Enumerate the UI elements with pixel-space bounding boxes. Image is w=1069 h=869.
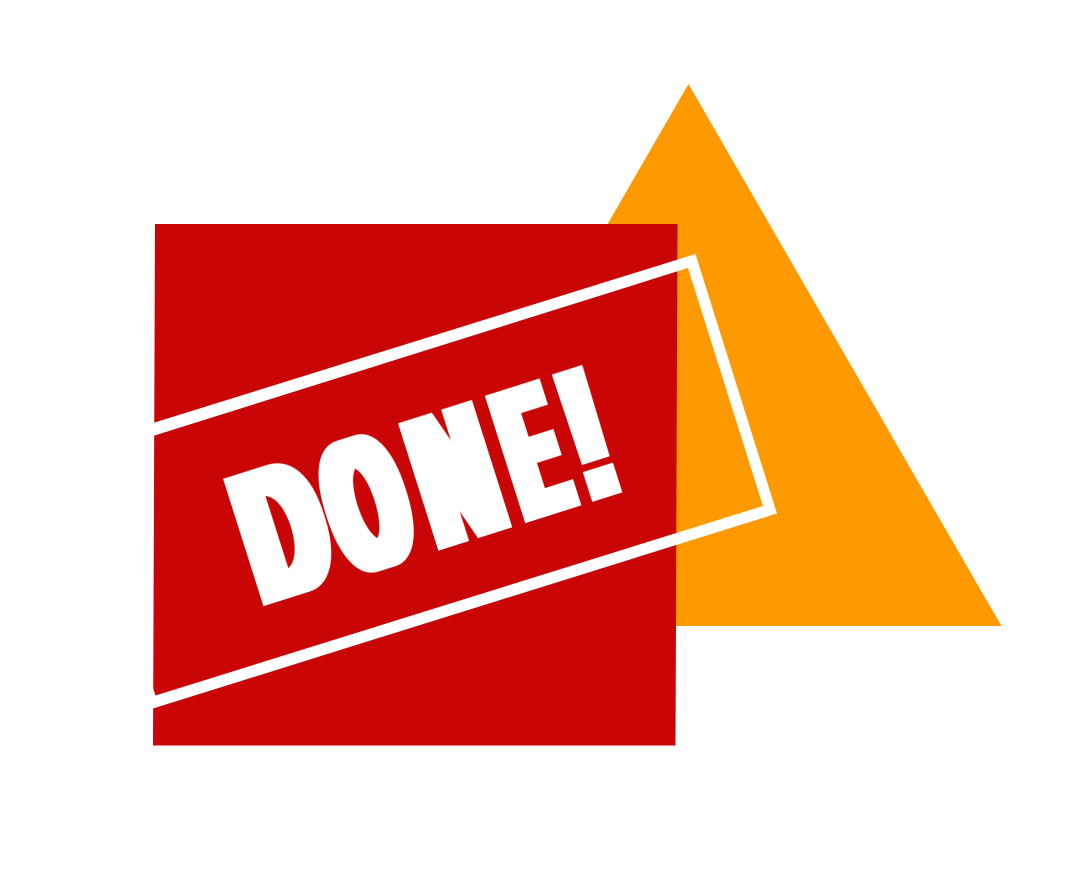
stamp text: ! [543,332,632,536]
red square [153,224,678,746]
stamp text: N [391,368,520,585]
white tilted frame [153,254,777,708]
stamp text: D [215,421,351,640]
orange triangle [376,84,1002,626]
stamp text: E [479,347,586,556]
stamp text: O [301,396,432,613]
